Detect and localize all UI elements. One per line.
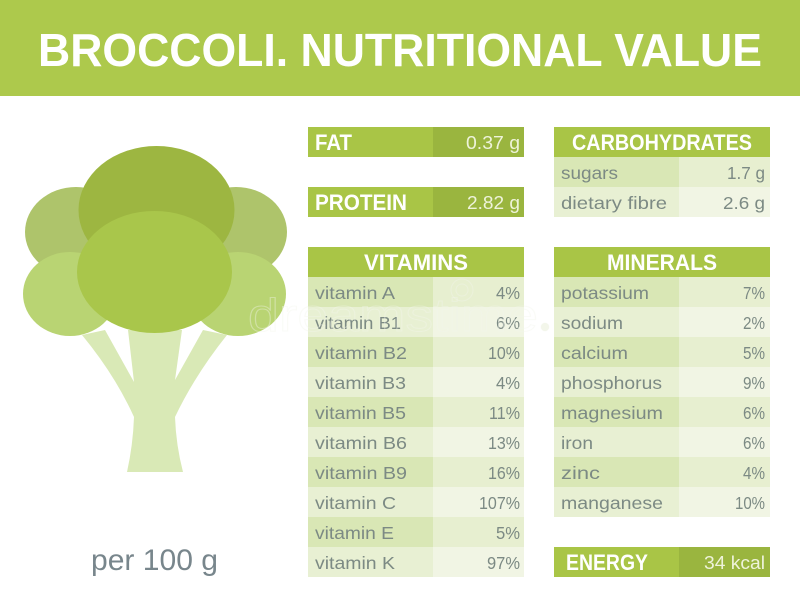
title: BROCCOLI. NUTRITIONAL VALUE — [38, 24, 762, 76]
panel: minerals: 10% — [735, 493, 765, 513]
panel: energy — [554, 547, 770, 577]
panel: minerals: 6% — [743, 433, 765, 453]
panel: carbohydrates: 1.7 g — [727, 163, 765, 183]
panel: vitamins: 4% — [496, 373, 520, 393]
panel: minerals: MINERALS — [607, 250, 717, 275]
panel: vitamins: 10% — [488, 343, 520, 363]
panel: minerals: 7% — [743, 283, 765, 303]
panel: carbohydrates: sugars — [561, 163, 618, 183]
panel: vitamins — [308, 247, 524, 577]
panel: protein — [308, 187, 524, 217]
panel: vitamins: 4% — [496, 283, 520, 303]
panel: fat: FAT — [315, 130, 353, 155]
panel: minerals: sodium — [561, 313, 623, 333]
panel: minerals: 2% — [743, 313, 765, 333]
panel: minerals: zinc — [561, 463, 600, 483]
panel: vitamins: 5% — [496, 523, 520, 543]
panel: vitamins: 107% — [479, 493, 520, 513]
panel: vitamins: 97% — [487, 553, 520, 573]
panel: minerals: manganese — [561, 493, 663, 513]
panel: minerals: 6% — [743, 403, 765, 423]
panel: minerals: 9% — [743, 373, 765, 393]
panel: carbohydrates: CARBOHYDRATES — [572, 130, 752, 155]
panel: minerals: calcium — [561, 343, 628, 363]
icon: broccoli — [23, 146, 287, 472]
panel: vitamins: vitamin B6 — [315, 433, 407, 453]
panel: minerals: iron — [561, 433, 593, 453]
panel: vitamins: vitamin B1 — [315, 313, 401, 333]
panel: vitamins: vitamin E — [315, 523, 394, 543]
panel: vitamins: VITAMINS — [364, 250, 468, 275]
per 100 g caption: per 100 g — [91, 544, 218, 577]
panel: vitamins: 13% — [488, 433, 520, 453]
watermark: dreamstime — [248, 289, 538, 341]
panel: protein: PROTEIN — [315, 190, 407, 215]
panel: vitamins: 11% — [489, 403, 520, 423]
watermark — [248, 279, 549, 341]
panel: minerals: 4% — [743, 463, 765, 483]
panel: vitamins: vitamin B5 — [315, 403, 406, 423]
panel: minerals: phosphorus — [561, 373, 662, 393]
panel: protein: 2.82 g — [467, 193, 520, 213]
panel: carbohydrates — [554, 127, 770, 217]
panel: fat: 0.37 g — [466, 133, 520, 153]
title banner — [0, 0, 800, 96]
panel: vitamins: vitamin C — [315, 493, 396, 513]
panel: fat — [308, 127, 524, 157]
panel: minerals: potassium — [561, 283, 649, 303]
panel: vitamins: 6% — [496, 313, 520, 333]
panel: carbohydrates: 2.6 g — [723, 193, 765, 213]
panel: vitamins: vitamin A — [315, 283, 395, 303]
panel: vitamins: vitamin B3 — [315, 373, 406, 393]
panel: vitamins: vitamin B2 — [315, 343, 407, 363]
panel: minerals — [554, 247, 770, 517]
panel: energy: ENERGY — [566, 550, 648, 575]
panel: energy: 34 kcal — [704, 553, 765, 573]
panel: minerals: magnesium — [561, 403, 663, 423]
panel: minerals: 5% — [743, 343, 765, 363]
panel: vitamins: 16% — [488, 463, 520, 483]
panel: carbohydrates: dietary fibre — [561, 193, 667, 213]
panel: vitamins: vitamin B9 — [315, 463, 407, 483]
panel: vitamins: vitamin K — [315, 553, 395, 573]
